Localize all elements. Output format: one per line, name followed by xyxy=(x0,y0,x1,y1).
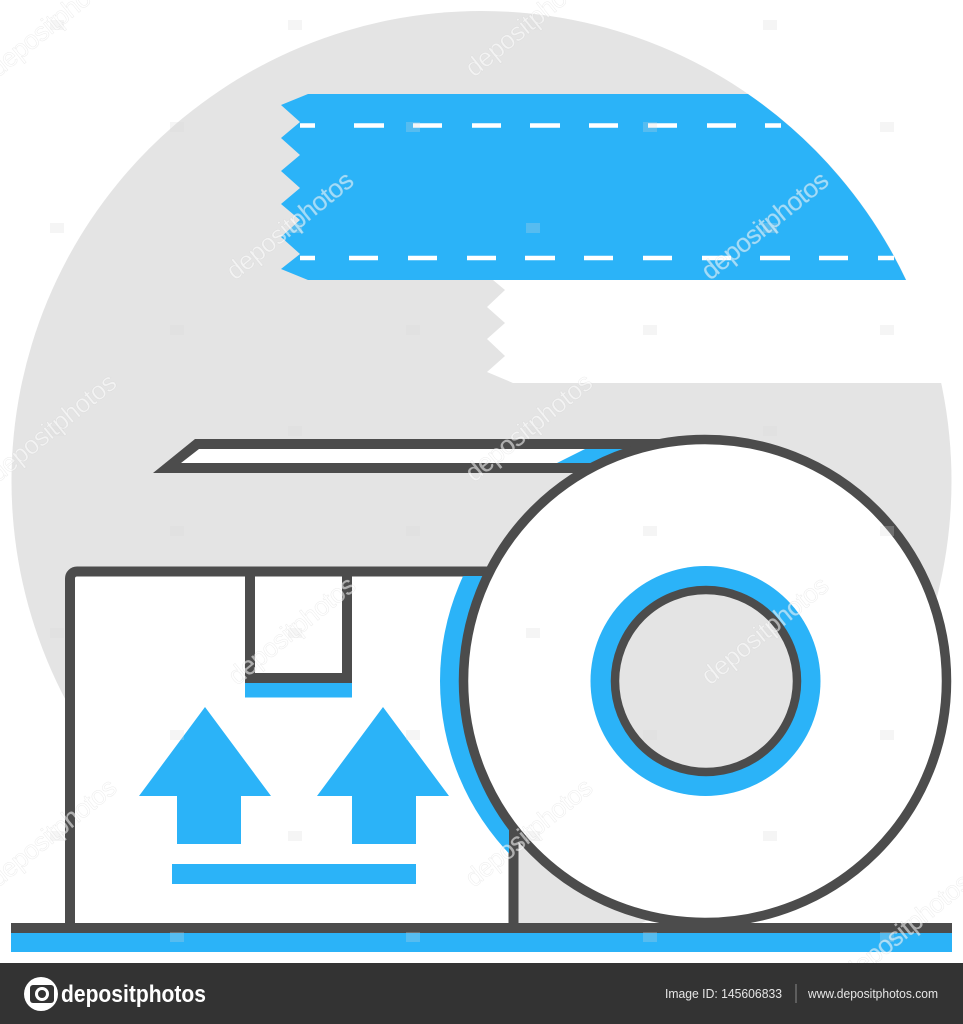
watermarks: depositphotos xyxy=(222,570,361,691)
watermarks: depositphotos xyxy=(220,165,359,286)
ground line xyxy=(11,923,952,952)
watermark camera icons xyxy=(50,20,894,942)
white tape strip xyxy=(487,280,963,383)
website: www.depositphotos.com xyxy=(807,987,938,1001)
watermarks: depositphotos xyxy=(459,367,598,488)
cardboard box xyxy=(70,572,514,932)
footer bar xyxy=(0,963,963,1024)
watermarks: depositphotos xyxy=(459,772,598,893)
footer logo xyxy=(24,977,206,1011)
roll core xyxy=(615,590,797,772)
top stitching xyxy=(300,123,781,128)
image id: Image ID: 145606833 xyxy=(665,987,782,1001)
watermarks: depositphotos xyxy=(695,570,834,691)
icon: up arrow right xyxy=(317,707,449,844)
blue tape strip xyxy=(281,94,906,280)
footer divider xyxy=(796,984,797,1003)
this side up bar xyxy=(172,864,416,884)
roll blue ring xyxy=(590,566,820,796)
loose tape end xyxy=(153,439,720,473)
flap blue shadow xyxy=(245,683,352,698)
footer logo: depositphotos xyxy=(61,981,206,1008)
tape roll xyxy=(464,440,946,922)
watermarks: depositphotos xyxy=(695,165,834,286)
blue roll shadow xyxy=(440,576,509,854)
box tape flap xyxy=(250,576,347,678)
icon: up arrow left xyxy=(139,707,271,844)
bottom stitching xyxy=(300,256,894,260)
